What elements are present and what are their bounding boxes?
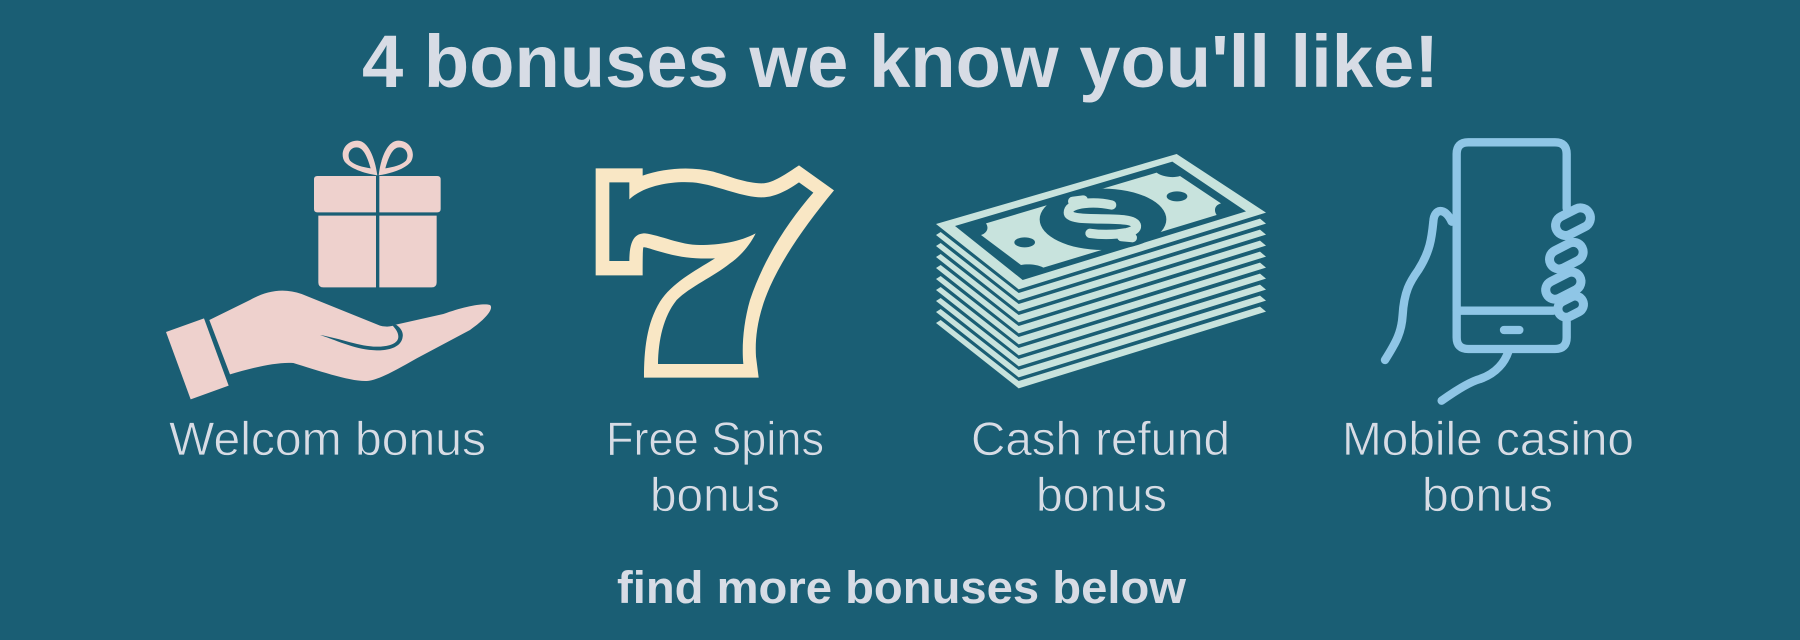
icon: lucky seven — [596, 165, 834, 378]
label: welcome bonus: Welcom bonus — [169, 412, 486, 465]
icon: hand holding gift — [166, 141, 491, 399]
title: 4 bonuses we know you'll like! — [362, 20, 1439, 103]
thumb crease — [320, 325, 403, 350]
label: mobile casino bonus: Mobile casino — [1342, 412, 1634, 465]
bill holes — [1014, 237, 1035, 247]
footer call to action: find more bonuses below — [617, 562, 1187, 613]
hand outline — [1385, 211, 1452, 360]
label: mobile casino bonus: bonus — [1422, 468, 1553, 521]
wrist line — [1442, 352, 1508, 401]
label: cash refund bonus — [971, 412, 1230, 521]
dollar sign — [1068, 200, 1136, 238]
home button — [1504, 317, 1519, 342]
stacked bills — [936, 219, 1266, 388]
icon: stack of cash — [936, 154, 1266, 388]
label: free spins bonus: Free Spins — [606, 412, 824, 465]
phone body — [1457, 142, 1567, 349]
gift box — [318, 216, 437, 287]
label: cash refund bonus: bonus — [1036, 468, 1167, 521]
label: mobile casino bonus — [1342, 412, 1634, 521]
bill medallion — [1040, 189, 1166, 250]
open hand — [209, 291, 491, 381]
fingers — [1542, 204, 1594, 320]
label: free spins bonus: bonus — [650, 468, 780, 521]
bill face — [981, 173, 1221, 268]
top bill frame — [936, 154, 1266, 289]
gift bow — [343, 141, 413, 175]
label: cash refund bonus: Cash refund — [971, 412, 1230, 465]
icon: hand holding phone — [1385, 142, 1594, 401]
label: free spins bonus — [606, 412, 824, 521]
shirt cuff — [166, 318, 229, 399]
gift lid — [314, 176, 441, 212]
screen divider — [1457, 298, 1553, 323]
